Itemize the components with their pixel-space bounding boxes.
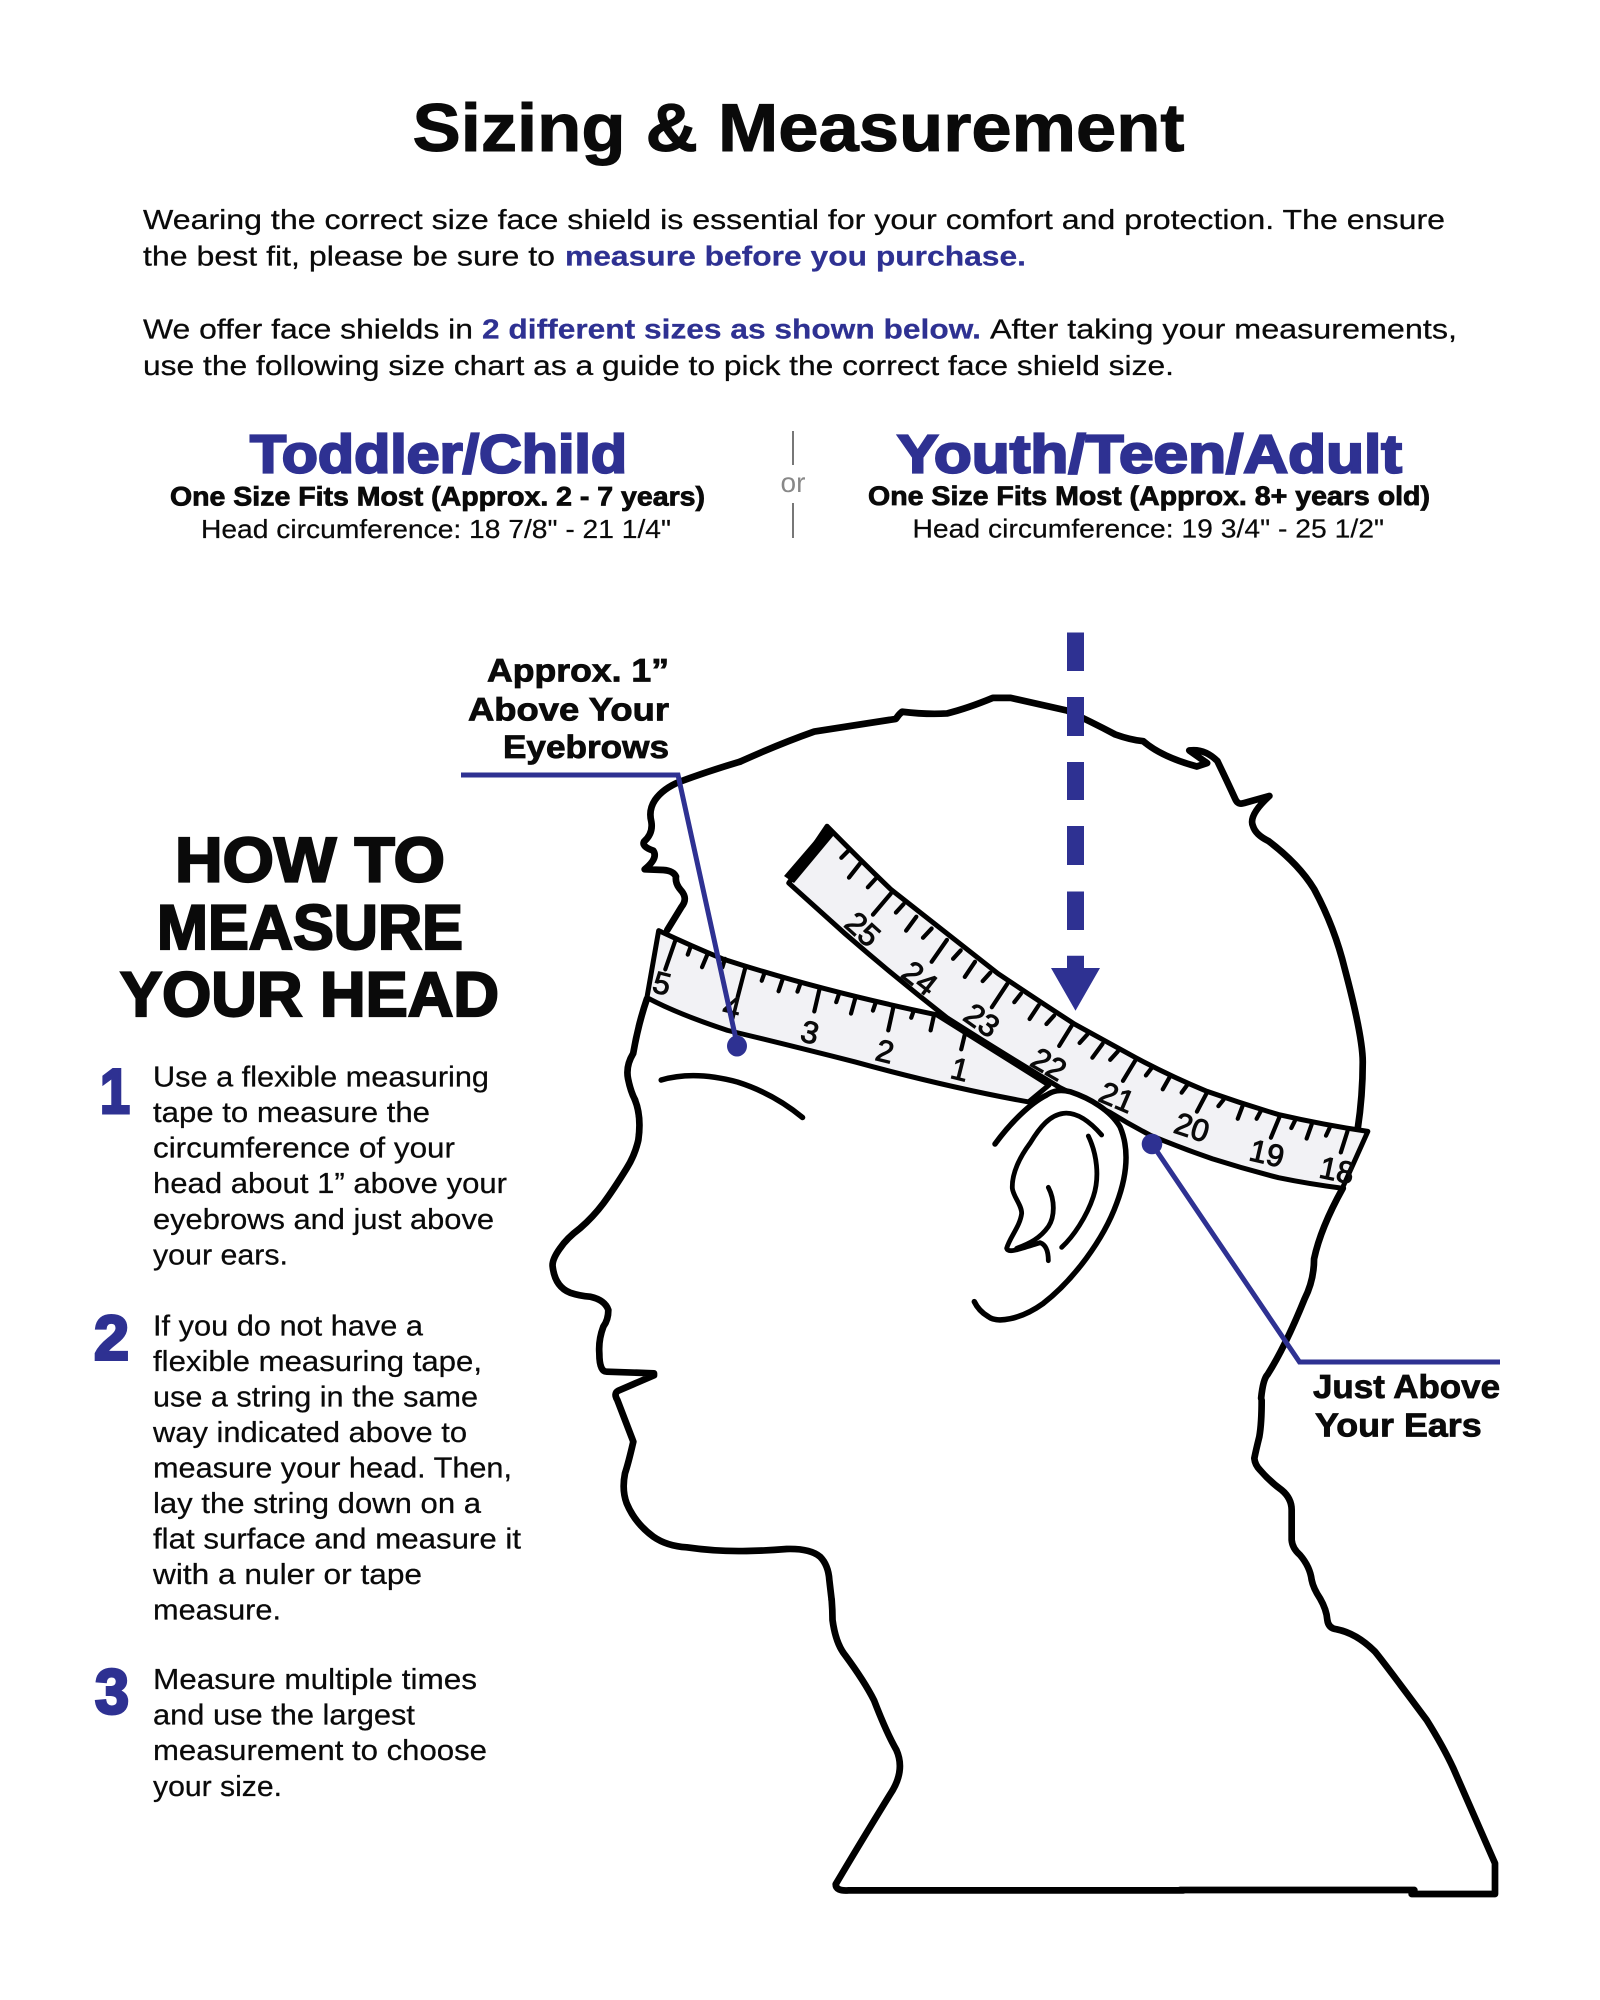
- how to heading: MEASURE: [157, 893, 463, 963]
- arrow: dashed down arrow: [1051, 632, 1100, 1011]
- step 3: measurement to choose: [153, 1735, 487, 1767]
- step 3: and use the largest: [153, 1700, 415, 1732]
- step 2: lay the string down on a: [153, 1488, 481, 1520]
- title: Sizing & Measurement: [412, 90, 1184, 166]
- callout: above your eyebrows: Above Your: [468, 692, 669, 728]
- wrapped band numbers: [838, 905, 1357, 1191]
- wrapped band numbers: 21: [1094, 1075, 1140, 1120]
- size option: toddler/child: Toddler/Child: [250, 424, 627, 484]
- step 1: head about 1” above your: [153, 1168, 508, 1200]
- size option: youth/teen/adult: Youth/Teen/Adult: [897, 424, 1402, 484]
- step number 1: 1: [100, 1057, 130, 1127]
- step 1: tape to measure the: [153, 1097, 430, 1129]
- intro paragraph 2: use the following size chart as a guide to pick the correct face shield size.: [143, 350, 1174, 381]
- intro paragraph 2: [143, 314, 1457, 381]
- step number 3: 3: [95, 1658, 129, 1728]
- tape end cap: [784, 826, 834, 883]
- step 1: circumference of your: [153, 1132, 456, 1164]
- measuring tape: front band: [647, 931, 1049, 1102]
- step 1: [100, 1057, 508, 1272]
- icon: ear: [974, 1091, 1126, 1320]
- step number 2: 2: [94, 1304, 129, 1374]
- intro paragraph 2: 2 different sizes as shown below.: [482, 314, 981, 344]
- step 3: Measure multiple times: [153, 1664, 477, 1696]
- intro paragraph 2: We offer face shields in: [143, 314, 473, 344]
- step 2: with a nuler or tape: [152, 1559, 422, 1591]
- size option: youth/teen/adult: One Size Fits Most (Approx. 8+ years old): [868, 481, 1430, 511]
- size option: toddler/child: Head circumference: 18 7/8" - 21 1/4": [201, 514, 671, 544]
- wrapped band numbers: 22: [1025, 1041, 1072, 1088]
- or divider: [781, 431, 805, 538]
- wrapped band numbers: 19: [1246, 1133, 1288, 1174]
- size option: youth/teen/adult: [868, 424, 1430, 544]
- intro paragraph 1: [143, 204, 1445, 272]
- front band numbers: 2: [872, 1032, 897, 1071]
- wrapped band numbers: 20: [1170, 1106, 1214, 1149]
- how to heading: [120, 826, 499, 1030]
- wrapped band numbers: 23: [958, 996, 1006, 1045]
- front band numbers: 1: [947, 1050, 972, 1089]
- step 2: way indicated above to: [152, 1417, 467, 1449]
- step 3: [95, 1658, 487, 1803]
- step 3: your size.: [153, 1771, 282, 1803]
- front band numbers: [649, 964, 972, 1089]
- intro paragraph 1: Wearing the correct size face shield is essential for your comfort and protection. The ensure: [143, 204, 1445, 235]
- callout: just above your ears: Just Above: [1313, 1368, 1500, 1405]
- front band numbers: 5: [649, 964, 674, 1003]
- callout: above your eyebrows: Eyebrows: [503, 729, 669, 765]
- or divider: or: [781, 467, 805, 498]
- step 2: If you do not have a: [153, 1310, 423, 1342]
- front band numbers: 3: [797, 1013, 822, 1052]
- step 2: measure.: [153, 1594, 281, 1626]
- measuring tape: wrapped band: [784, 826, 1368, 1191]
- size option: youth/teen/adult: Head circumference: 19 3/4" - 25 1/2": [912, 514, 1384, 544]
- step 2: measure your head. Then,: [153, 1452, 512, 1484]
- size option: toddler/child: [170, 424, 705, 544]
- callout: just above your ears: Your Ears: [1315, 1407, 1482, 1444]
- step 1: your ears.: [153, 1240, 288, 1272]
- step 1: eyebrows and just above: [153, 1204, 494, 1236]
- intro paragraph 1: the best fit, please be sure to: [143, 240, 555, 272]
- size option: toddler/child: One Size Fits Most (Approx. 2 - 7 years): [170, 482, 705, 512]
- how to heading: HOW TO: [175, 826, 445, 896]
- wrapped band numbers: 25: [838, 905, 887, 954]
- intro paragraph 2: After taking your measurements,: [990, 314, 1457, 344]
- how to heading: YOUR HEAD: [120, 960, 499, 1030]
- step 2: flexible measuring tape,: [153, 1346, 482, 1378]
- head outline: [553, 698, 1495, 1894]
- callout: above your eyebrows: Approx. 1”: [487, 652, 669, 688]
- step 2: flat surface and measure it: [153, 1524, 521, 1556]
- eyebrow: [661, 1076, 803, 1118]
- callout: above your eyebrows: [461, 652, 747, 1056]
- step 2: [94, 1304, 521, 1626]
- step 2: use a string in the same: [153, 1382, 478, 1414]
- callout: just above your ears: [1142, 1134, 1500, 1444]
- wrapped band numbers: 18: [1316, 1150, 1357, 1191]
- step 1: Use a flexible measuring: [153, 1062, 489, 1094]
- intro paragraph 1: measure before you purchase.: [565, 240, 1026, 272]
- front band numbers: 4: [719, 988, 744, 1027]
- wrapped band numbers: 24: [895, 954, 944, 1003]
